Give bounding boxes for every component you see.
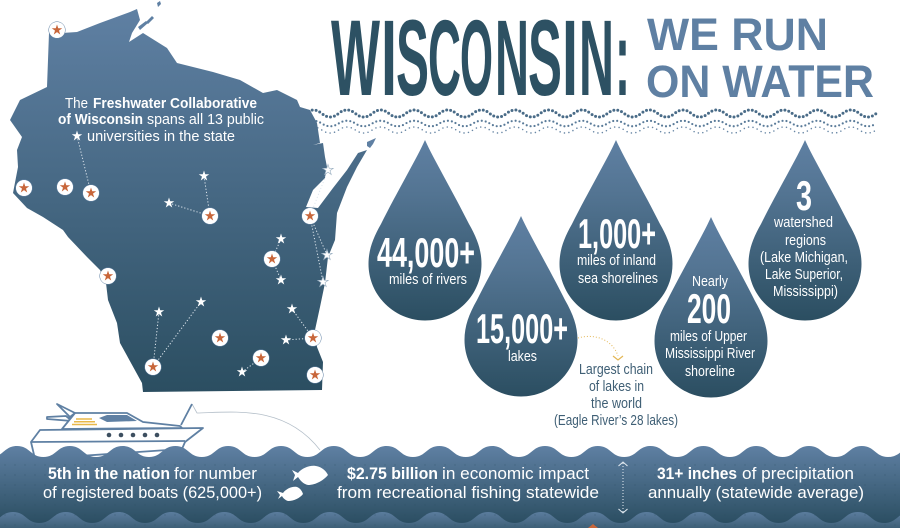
callout: largest chain of lakes: Largest chain [579,361,653,378]
drop: Upper Mississippi shoreline: shoreline [685,363,735,380]
title: Wisconsin: I [562,0,578,118]
drop: Upper Mississippi shoreline: Nearly [692,273,728,290]
icon: fish [277,466,328,501]
title: Wisconsin: S [396,0,429,118]
map description text: spans all 13 public [147,111,264,128]
map description text [58,95,264,145]
map outline [10,9,367,392]
drop: watershed regions: Lake Superior, [765,266,843,283]
drop: inland sea shorelines [560,140,672,320]
drop: watershed regions: regions [785,232,826,249]
title: Wisconsin: C [428,0,461,118]
islands [138,1,376,148]
drop: Upper Mississippi shoreline [654,217,768,398]
text: precipitation: 31+ inches [657,464,737,483]
map description text: of Wisconsin [58,111,143,128]
title: Wisconsin: O [460,0,493,118]
map description text: The [65,95,88,112]
drop: inland sea shorelines: sea shorelines [578,270,658,287]
callout: largest chain of lakes: the world [591,395,642,412]
title: On water: ON WATER [646,56,874,107]
text: fishing impact [337,464,599,502]
title: We run: WE RUN [647,9,828,60]
callout: largest chain of lakes: (Eagle River’s 28 lakes) [554,412,678,429]
text: fishing impact: $2.75 billion [347,464,438,483]
university markers [16,22,323,383]
map description text: universities in the state [87,128,235,145]
title [331,0,874,118]
drop: watershed regions: Mississippi) [773,283,838,300]
text: registered boats: 5th in the nation [48,464,170,483]
arrow: lakes callout [578,336,623,360]
drop: lakes: 15,000+ [476,305,568,352]
fishing line [192,404,320,450]
drop: Upper Mississippi shoreline: 200 [687,285,731,332]
drop: miles of rivers [368,140,482,320]
title: Wisconsin: N [579,0,614,118]
arrow: precipitation range [618,462,628,513]
text: precipitation: annually (statewide average) [648,483,864,502]
title: Wisconsin: I [381,0,397,118]
drop: watershed regions: (Lake Michigan, [760,249,848,266]
panel: water band [0,446,900,528]
map description text: Freshwater Collaborative [93,95,257,112]
title: Wisconsin: S [528,0,562,118]
drop: Upper Mississippi shoreline: miles of Upper [670,328,747,345]
icon: boat [31,404,203,459]
title: Wisconsin: W [331,0,380,118]
drop: watershed regions [748,140,862,320]
title: : [615,0,630,118]
text: precipitation [648,464,864,502]
drop: Upper Mississippi shoreline: Mississippi River [665,345,755,362]
drop: watershed regions: watershed [773,214,833,231]
text: registered boats: of registered boats (625,000+) [43,483,262,502]
campus connection lines [77,136,328,372]
title: Wisconsin: N [495,0,529,118]
drop: lakes [464,216,578,396]
drop: inland sea shorelines: miles of inland [577,252,656,269]
drop: inland sea shorelines: 1,000+ [578,210,656,257]
drop: lakes: lakes [508,348,537,365]
text: registered boats [43,464,262,502]
drop: watershed regions: 3 [796,172,812,219]
text: fishing impact: from recreational fishing statewide [337,483,599,502]
drop: miles of rivers: 44,000+ [377,229,475,276]
branch campus stars [72,130,333,376]
title: Wisconsin [331,0,630,118]
drop: miles of rivers: miles of rivers [389,271,467,288]
callout: largest chain of lakes [554,361,678,429]
text: registered boats: for number [174,464,257,483]
panel: Wisconsin map [10,1,376,392]
callout: largest chain of lakes: of lakes in [589,378,644,395]
text: fishing impact: in economic impact [442,464,589,483]
text: precipitation: of precipitation [742,464,854,483]
